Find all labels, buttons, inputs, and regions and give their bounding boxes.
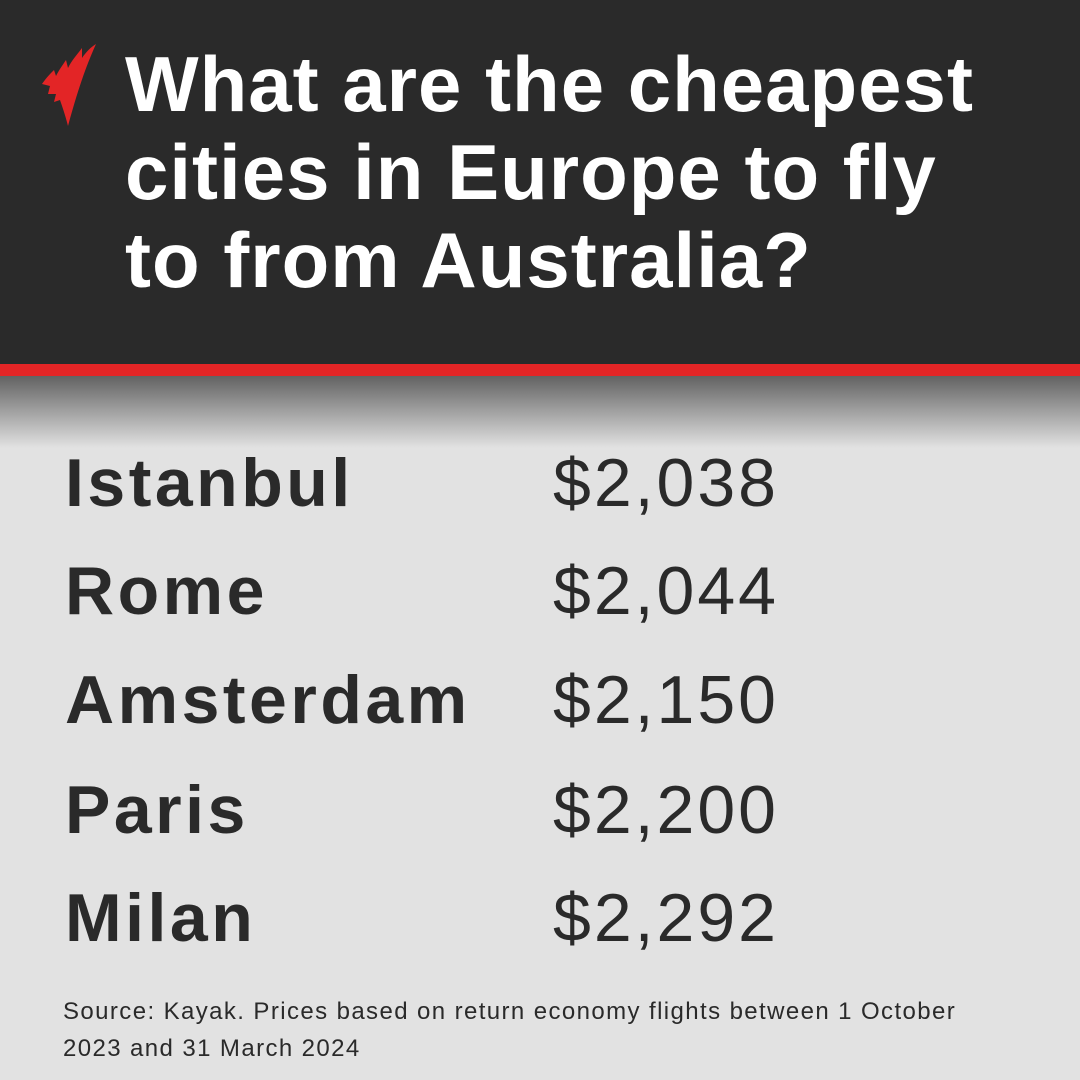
row: Rome: Rome xyxy=(65,553,268,629)
row: Istanbul xyxy=(65,445,779,521)
row: Paris xyxy=(65,772,779,848)
row: Amsterdam: $2,150 xyxy=(553,662,779,738)
row: Istanbul: $2,038 xyxy=(553,445,779,521)
row: Paris: Paris xyxy=(65,772,249,848)
source note: Source: Kayak. Prices based on return economy flights between 1 October xyxy=(63,998,956,1025)
source note: 2023 and 31 March 2024 xyxy=(63,1035,361,1062)
row: Milan: Milan xyxy=(65,880,256,956)
row: Milan xyxy=(65,880,779,956)
row: Rome: $2,044 xyxy=(553,553,779,629)
row: Paris: $2,200 xyxy=(553,772,779,848)
source note xyxy=(63,998,956,1062)
row: Rome xyxy=(65,553,779,629)
row: Milan: $2,292 xyxy=(553,880,779,956)
row: Amsterdam xyxy=(65,662,779,738)
title: What are the cheapest xyxy=(125,40,974,128)
title xyxy=(125,40,974,304)
title: cities in Europe to fly xyxy=(125,128,937,216)
title: to from Australia? xyxy=(125,216,812,304)
row: Amsterdam: Amsterdam xyxy=(65,662,471,738)
icon: logo xyxy=(42,44,96,126)
row: Istanbul: Istanbul xyxy=(65,445,354,521)
